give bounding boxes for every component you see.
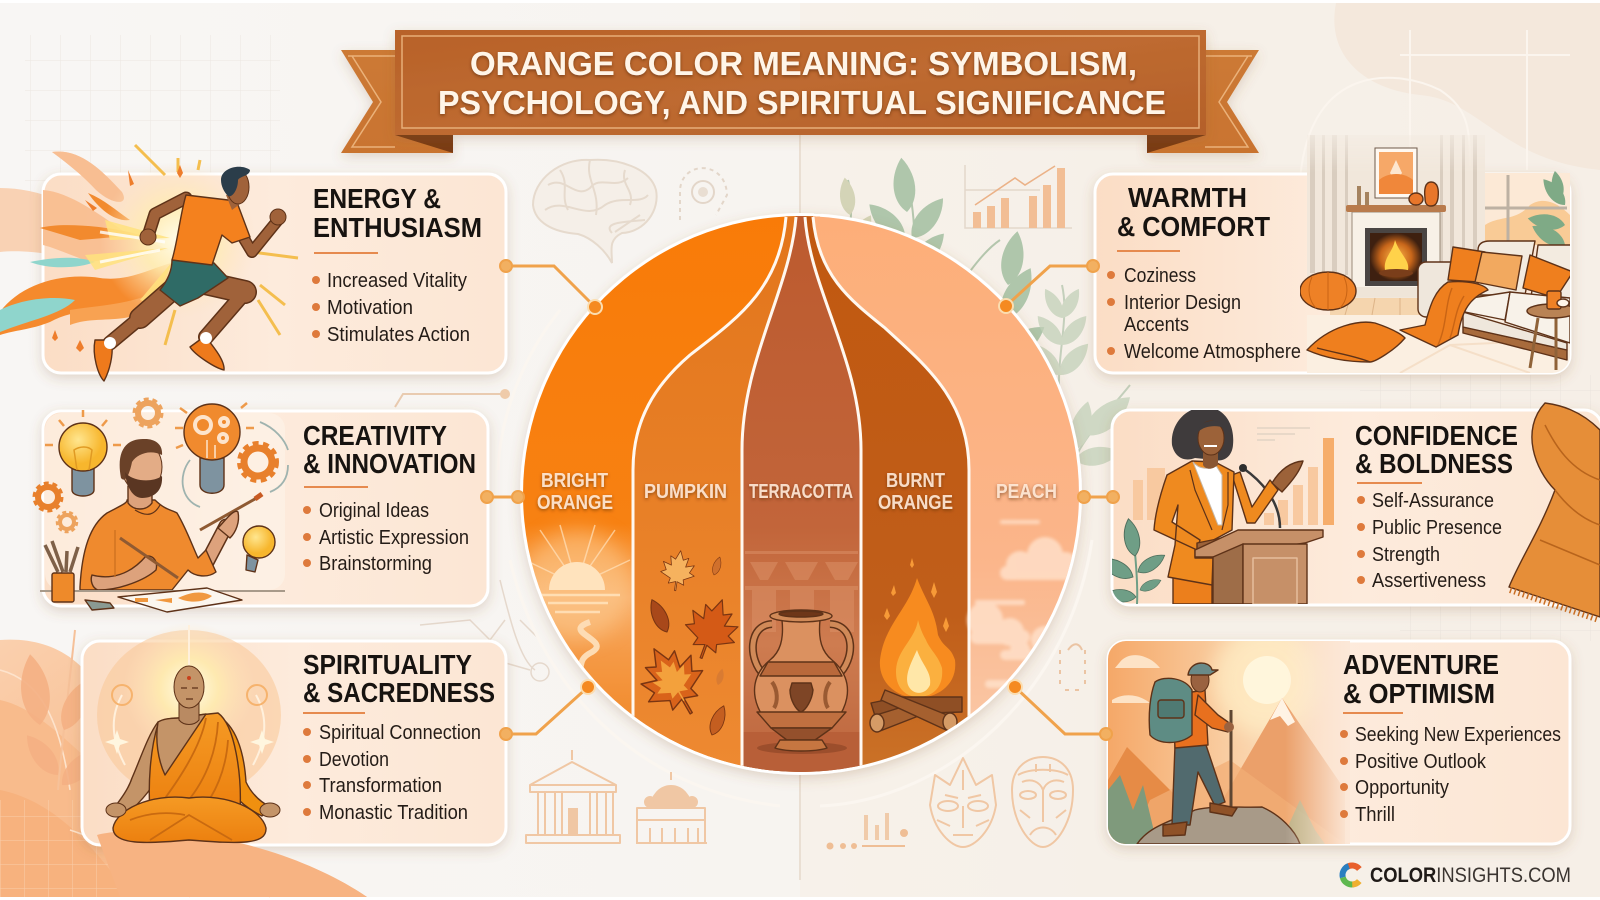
heading: WARMTH xyxy=(1128,182,1247,213)
illustration: painter xyxy=(80,439,262,590)
illustration: mountain landscape xyxy=(1108,625,1350,844)
bullet list: Increased Vitality xyxy=(327,270,467,292)
heading xyxy=(1355,420,1518,479)
background icon: greek temple xyxy=(526,750,620,843)
bullet list: Coziness xyxy=(1124,265,1196,287)
heading: & SACREDNESS xyxy=(303,677,495,708)
heading: & COMFORT xyxy=(1117,211,1270,242)
bullet list: Thrill xyxy=(1355,804,1395,826)
heading: ENERGY & xyxy=(313,183,441,214)
background network sketch xyxy=(420,580,549,681)
bullet list: Welcome Atmosphere xyxy=(1124,341,1301,363)
bullet list: Seeking New Experiences xyxy=(1355,724,1561,746)
segment labels: BURNT xyxy=(886,470,945,492)
color wheel xyxy=(520,205,1100,790)
illustration: sunset xyxy=(528,520,632,668)
bullet list xyxy=(303,500,469,575)
illustration: room backdrop xyxy=(1307,135,1485,300)
segment: burnt orange xyxy=(805,205,969,790)
illustration: side table xyxy=(1526,290,1570,370)
background icon: domed temple xyxy=(636,772,707,843)
heading xyxy=(313,183,482,243)
heading: & BOLDNESS xyxy=(1355,448,1513,479)
bullet list xyxy=(312,270,470,346)
segment: peach xyxy=(813,216,1079,716)
bullet list: Motivation xyxy=(327,297,413,319)
heading xyxy=(303,649,495,708)
background icon: dashed signal xyxy=(680,168,727,220)
illustration: framed picture xyxy=(1375,148,1417,198)
bullet list: Brainstorming xyxy=(319,553,432,575)
panel: spirituality & sacredness xyxy=(82,622,506,897)
bullet list: Positive Outlook xyxy=(1355,751,1487,773)
illustration: plant xyxy=(1112,518,1166,604)
illustration: runner xyxy=(94,167,286,381)
bullet list xyxy=(1107,265,1301,363)
background icon: brain xyxy=(533,160,657,263)
segment: pumpkin xyxy=(627,205,796,790)
bullet list: Opportunity xyxy=(1355,777,1449,799)
illustration: table, cup and palette xyxy=(40,541,285,612)
bullet list: Artistic Expression xyxy=(319,527,469,549)
illustration: idea bulbs and gears xyxy=(34,399,288,572)
connector: energy xyxy=(500,260,602,314)
background plants: right of circle xyxy=(1026,285,1137,470)
panel: confidence & boldness xyxy=(1096,403,1600,620)
segment labels: TERRACOTTA xyxy=(749,481,853,503)
heading: CREATIVITY xyxy=(303,420,447,451)
illustration: meditating monk xyxy=(97,622,281,842)
bullet list: Original Ideas xyxy=(319,500,429,522)
illustration: autumn leaves xyxy=(640,550,739,736)
heading: ADVENTURE xyxy=(1343,649,1499,680)
bullet list: Accents xyxy=(1124,314,1189,336)
illustration: hill under monk xyxy=(97,831,367,897)
panel: adventure & optimism xyxy=(1108,625,1570,844)
bullet list: Stimulates Action xyxy=(327,324,470,346)
background icon: mask one xyxy=(930,758,996,847)
illustration: scarf xyxy=(1509,403,1600,620)
segment labels: PEACH xyxy=(996,481,1057,503)
illustration: background bars xyxy=(1133,428,1334,525)
panel: creativity & innovation xyxy=(34,399,488,612)
title text xyxy=(438,45,1166,121)
segment labels: BRIGHT xyxy=(541,470,608,492)
title text: ORANGE COLOR MEANING: SYMBOLISM, xyxy=(470,45,1137,82)
illustration: clouds xyxy=(967,520,1080,688)
connector: spirituality xyxy=(500,680,595,740)
segment: bright orange xyxy=(520,210,820,780)
heading: & INNOVATION xyxy=(303,448,476,479)
segment labels: ORANGE xyxy=(878,492,953,514)
title ribbon xyxy=(341,30,1259,153)
bullet list: Self-Assurance xyxy=(1372,490,1494,512)
connector: adventure xyxy=(1008,680,1112,740)
bullet list: Transformation xyxy=(319,775,442,797)
heading: SPIRITUALITY xyxy=(303,649,472,680)
decorative connector xyxy=(395,389,510,407)
illustration: greek vase xyxy=(753,610,850,751)
bullet list xyxy=(1357,490,1502,592)
illustration: hiker xyxy=(1149,663,1237,836)
logo: colorinsights.com xyxy=(1339,862,1571,888)
background icon: dotted marks xyxy=(1060,644,1085,690)
illustration: sofa xyxy=(1418,241,1578,360)
panel: energy & enthusiasm xyxy=(0,145,506,381)
background plants: upper right xyxy=(805,157,1050,364)
bullet list: Assertiveness xyxy=(1372,570,1486,592)
bullet list xyxy=(1340,724,1561,826)
illustration: podium xyxy=(1195,530,1323,604)
heading xyxy=(1117,182,1270,242)
connector: creativity xyxy=(481,491,524,503)
energy flames xyxy=(0,151,170,332)
segment labels: ORANGE xyxy=(537,492,613,514)
illustration: cushions and throw xyxy=(1307,247,1573,362)
illustration: temple frieze xyxy=(745,551,858,632)
title text: PSYCHOLOGY, AND SPIRITUAL SIGNIFICANCE xyxy=(438,84,1166,121)
outer arc decorations xyxy=(498,310,1092,806)
logo: colorinsights.com: COLORINSIGHTS.COM xyxy=(1370,864,1571,887)
segment: terracotta xyxy=(742,205,861,790)
icon: logo mark xyxy=(1339,862,1365,888)
bullet list xyxy=(303,722,481,824)
bullet list: Interior Design xyxy=(1124,292,1241,314)
background icon: mini chart xyxy=(826,813,908,850)
bullet list: Strength xyxy=(1372,544,1440,566)
heading xyxy=(1343,649,1499,709)
connector: warmth xyxy=(999,260,1099,313)
illustration: energy burst xyxy=(0,145,298,352)
illustration: houseplant xyxy=(1528,171,1566,244)
bottom-left decorative hills xyxy=(0,630,367,897)
heading xyxy=(303,420,476,479)
heading: ENTHUSIASM xyxy=(313,212,482,243)
bullet list: Monastic Tradition xyxy=(319,802,468,824)
background chart: growth bars xyxy=(965,165,1072,228)
segment labels: PUMPKIN xyxy=(644,481,727,503)
background icon: mask two xyxy=(1012,757,1073,847)
illustration: pouf xyxy=(1300,272,1356,310)
bullet list: Spiritual Connection xyxy=(319,722,481,744)
illustration: living room xyxy=(1300,135,1578,373)
illustration: speaker xyxy=(1154,407,1303,604)
bullet list: Public Presence xyxy=(1372,517,1502,539)
illustration: campfire xyxy=(870,558,962,732)
bullet list: Devotion xyxy=(319,749,389,771)
panel: warmth & comfort xyxy=(1095,135,1578,373)
connector: confidence xyxy=(1078,491,1119,503)
heading: CONFIDENCE xyxy=(1355,420,1518,451)
heading: & OPTIMISM xyxy=(1343,678,1495,709)
segment labels xyxy=(537,470,1057,514)
